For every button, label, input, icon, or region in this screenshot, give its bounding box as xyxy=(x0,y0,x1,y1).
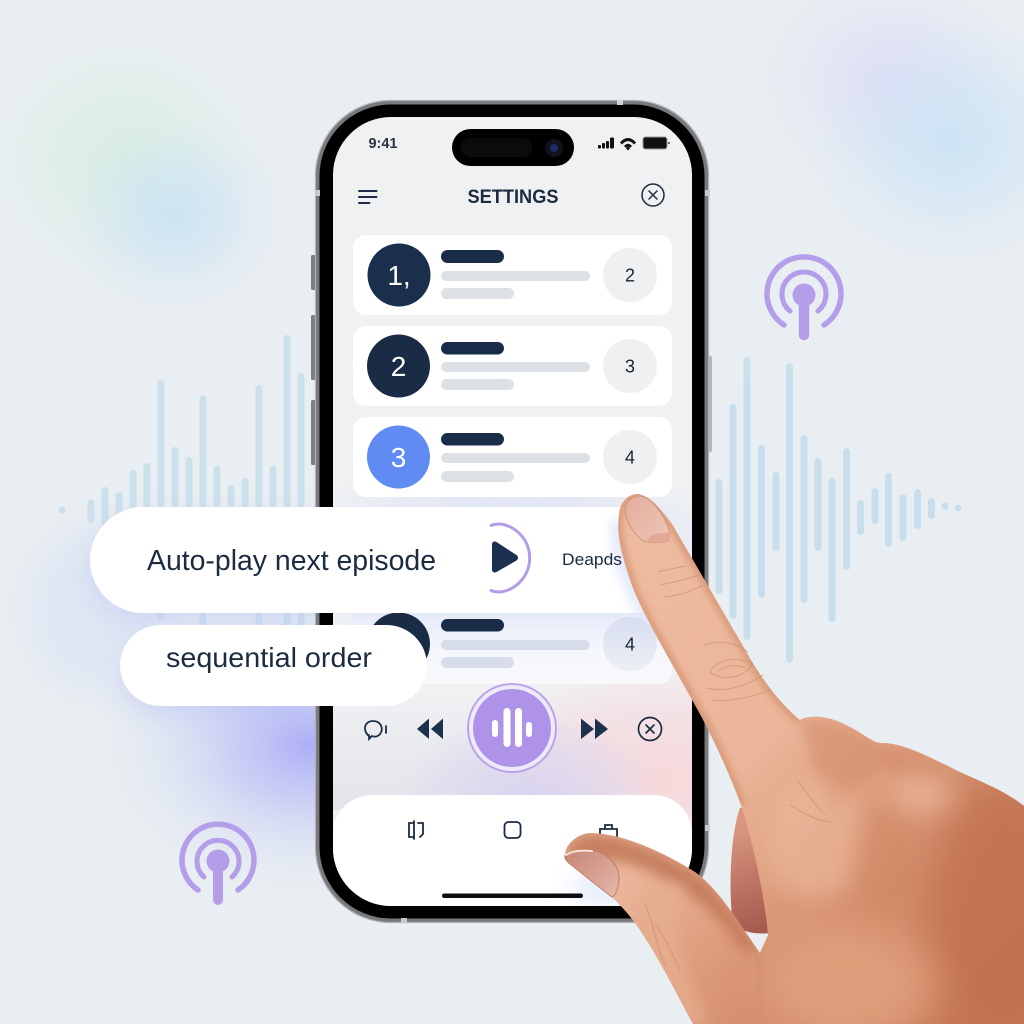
icon: close xyxy=(642,184,664,206)
waveform right xyxy=(716,357,962,663)
header xyxy=(359,184,664,208)
waveform left xyxy=(58,335,304,630)
pill: sequential order xyxy=(120,625,427,706)
status bar xyxy=(368,129,670,166)
pill: auto-play xyxy=(90,507,662,618)
button: play voice xyxy=(468,684,556,772)
phone body xyxy=(315,100,710,923)
list card 1 xyxy=(353,235,672,315)
icon: podcast top right xyxy=(767,257,841,335)
hand xyxy=(565,494,1024,1024)
phone xyxy=(311,100,712,924)
list card 3 xyxy=(353,417,672,497)
icon: repeat xyxy=(365,721,386,739)
list card 1: 1, xyxy=(387,260,411,291)
label: sequential order xyxy=(166,642,372,673)
icon: book xyxy=(409,821,423,839)
index nail xyxy=(625,496,670,542)
icon: play with arc xyxy=(491,524,530,592)
icon: podcast bottom left xyxy=(182,824,254,900)
knuckle wrinkles xyxy=(645,566,830,970)
list card 2 xyxy=(353,326,672,406)
icon: rewind xyxy=(417,718,443,739)
list card 3: 3 xyxy=(391,442,406,473)
player controls xyxy=(365,684,662,772)
screen xyxy=(333,117,692,906)
time: 9:41 xyxy=(368,135,398,152)
list card 2: 2 xyxy=(391,351,406,382)
bottom tab bar xyxy=(333,795,692,908)
home indicator xyxy=(442,894,583,898)
status icons xyxy=(598,137,670,150)
icon: bag xyxy=(600,825,617,840)
list card 2: 3 xyxy=(625,356,635,376)
list card 3: 4 xyxy=(625,448,635,468)
curled finger xyxy=(731,805,800,933)
shading xyxy=(565,494,1024,1024)
side buttons xyxy=(311,255,712,465)
thumb nail xyxy=(565,850,619,897)
small label: Deapds xyxy=(562,551,622,569)
icon: square xyxy=(504,822,520,838)
list card 4: 4 xyxy=(625,634,635,654)
label: Auto-play next episode xyxy=(147,545,436,577)
dynamic island xyxy=(452,129,574,166)
icon: fast forward xyxy=(581,718,608,739)
icon: close xyxy=(638,718,662,740)
icon: menu xyxy=(359,191,376,203)
hand base xyxy=(565,494,1024,1024)
pill glows xyxy=(92,520,342,715)
heading: SETTINGS xyxy=(468,187,558,208)
list card 1: 2 xyxy=(625,266,635,286)
list card 4 xyxy=(353,604,672,684)
